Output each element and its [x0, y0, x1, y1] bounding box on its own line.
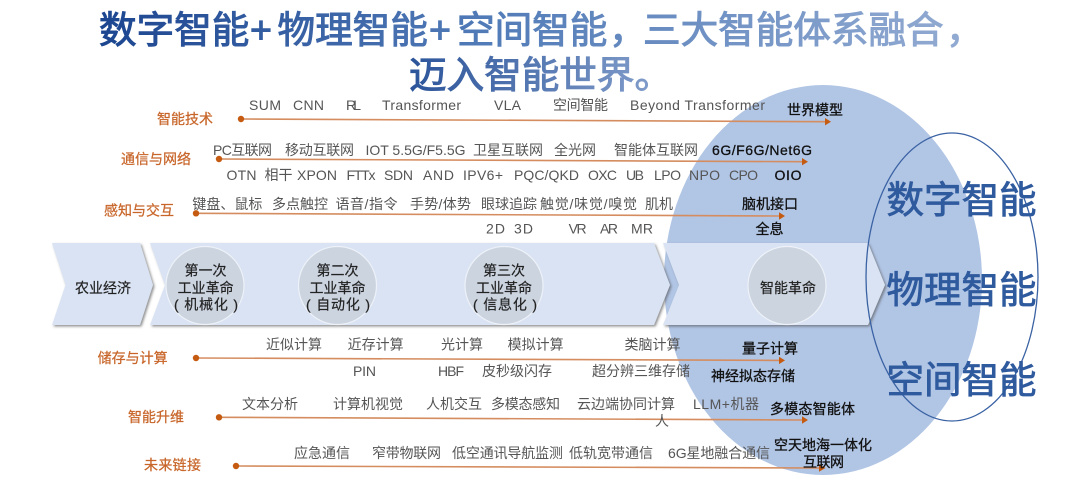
row: intelligent technology: RL [346, 97, 361, 113]
row: intelligence dimension upgrade: 多模态感知 [491, 396, 560, 412]
row: perception and interaction: 肌机 [645, 196, 673, 212]
row: storage and computing [98, 336, 798, 384]
node: intelligence revolution [748, 246, 826, 324]
title: 数字智能 [99, 9, 249, 51]
row: intelligence dimension upgrade: 文本分析 [242, 396, 298, 412]
row: intelligent technology: 空间智能 [553, 97, 608, 113]
label: perception and interaction: 感知与交互 [104, 202, 174, 218]
row: future links: 窄带物联网 [372, 445, 441, 461]
row: perception and interaction: AR [600, 220, 618, 236]
row: future links: 空天地海一体化 [774, 437, 872, 453]
row: communications and networks: XPON [297, 167, 337, 183]
row: perception and interaction: 多点触控 [272, 196, 328, 212]
row: communications and networks: 相干 [264, 167, 292, 183]
title: + [429, 9, 451, 51]
title: 空间智能 [457, 9, 607, 51]
row: future links [144, 437, 872, 473]
row: perception and interaction: MR [631, 220, 653, 236]
row: intelligence dimension upgrade: 人 [655, 413, 669, 429]
node: first industrial revolution: 工业革命 [178, 280, 234, 296]
label: intelligent technology: 智能技术 [157, 111, 213, 127]
row: communications and networks: 智能体互联网 [614, 142, 698, 158]
title: + [250, 9, 272, 51]
row: communications and networks: PC互联网 [213, 142, 272, 158]
row: communications and networks: 移动互联网 [285, 142, 354, 158]
title: 迈入智能世界。 [409, 54, 672, 96]
label: storage and computing: 储存与计算 [98, 350, 168, 366]
row: intelligent technology: VLA [494, 97, 522, 113]
row: perception and interaction: 语音/指令 [336, 196, 398, 212]
row: communications and networks: OXC [588, 167, 617, 183]
text: agricultural economy: 农业经济 [75, 280, 131, 296]
node: third industrial revolution [465, 246, 543, 324]
row: intelligent technology: CNN [293, 97, 324, 113]
row: communications and networks: OIO [774, 167, 802, 183]
row: intelligence dimension upgrade: 人机交互 [426, 396, 482, 412]
row: communications and networks: AND [423, 167, 454, 183]
node: first industrial revolution: ( 机械化 ) [174, 296, 238, 312]
title: 物理智能 [278, 9, 428, 51]
row: future links: 低空通讯导航监测 [452, 445, 563, 461]
node: intelligence revolution: 智能革命 [760, 280, 816, 296]
title [99, 9, 984, 96]
node: third industrial revolution: ( 信息化 ) [473, 296, 537, 312]
row: perception and interaction: 2D [486, 220, 505, 236]
row: storage and computing: 量子计算 [742, 340, 798, 356]
row: communications and networks: LPO [654, 167, 681, 183]
node: second industrial revolution: 第二次 [316, 262, 358, 278]
row: intelligence dimension upgrade: 多模态智能体 [770, 401, 855, 417]
row: communications and networks: CPO [729, 167, 758, 183]
node: first industrial revolution [166, 246, 244, 324]
chevron: agricultural economy [52, 243, 153, 325]
row: storage and computing: HBF [438, 363, 464, 379]
row: perception and interaction: 触觉/味觉/嗅觉 [540, 196, 637, 212]
row: intelligent technology: SUM [249, 97, 281, 113]
label: future links: 未来链接 [144, 457, 201, 473]
row: intelligence dimension upgrade: LLM+机器 [693, 396, 759, 412]
row: intelligent technology: Beyond Transformer [630, 97, 765, 113]
row: communications and networks [121, 142, 812, 183]
text: physical intelligence: 物理智能 [886, 269, 1036, 311]
title: ， [609, 9, 647, 51]
row: perception and interaction [104, 196, 798, 237]
row: communications and networks: OTN [226, 167, 256, 183]
row: communications and networks: NPO [689, 167, 720, 183]
row: future links: 6G星地融合通信 [668, 445, 770, 461]
row: communications and networks: 6G/F6G/Net6G [712, 142, 812, 158]
row: communications and networks: PQC/QKD [514, 167, 579, 183]
row: storage and computing: 神经拟态存储 [711, 368, 795, 384]
text: spatial intelligence: 空间智能 [886, 359, 1036, 401]
row: communications and networks: FTTx [346, 167, 376, 183]
row: perception and interaction: 3D [514, 220, 533, 236]
row: perception and interaction: VR [569, 220, 587, 236]
row: perception and interaction: 全息 [756, 221, 784, 237]
row: intelligent technology: Transformer [382, 97, 461, 113]
node: second industrial revolution [298, 246, 376, 324]
row: communications and networks: IPV6+ [463, 167, 503, 183]
row: perception and interaction: 键盘、鼠标 [192, 196, 262, 212]
row: intelligent technology [157, 97, 843, 127]
row: communications and networks: SDN [384, 167, 413, 183]
node: first industrial revolution: 第一次 [184, 262, 226, 278]
outline ellipse: three intelligence systems [866, 133, 1038, 421]
title: 三大智能体系融合 [643, 9, 944, 51]
large blue ellipse: intelligent world [664, 85, 982, 475]
row: intelligence dimension upgrade: 计算机视觉 [333, 396, 403, 412]
node: second industrial revolution: ( 自动化 ) [306, 296, 370, 312]
text: digital intelligence: 数字智能 [886, 179, 1036, 221]
row: intelligence dimension upgrade [128, 396, 855, 429]
chevron: intelligence revolution [663, 243, 885, 325]
node: third industrial revolution: 工业革命 [476, 280, 532, 296]
row: storage and computing: 光计算 [441, 336, 483, 352]
row: storage and computing: 皮秒级闪存 [482, 363, 552, 379]
label: communications and networks: 通信与网络 [121, 151, 191, 167]
title: ， [946, 9, 984, 51]
label: intelligence dimension upgrade: 智能升维 [128, 409, 184, 425]
row: intelligence dimension upgrade: 云边端协同计算 [577, 396, 675, 412]
chevron: industrial revolutions [150, 243, 670, 325]
row: communications and networks: 全光网 [554, 142, 596, 158]
row: future links: 低轨宽带通信 [569, 445, 653, 461]
row: perception and interaction: 脑机接口 [742, 196, 798, 212]
row: storage and computing: 类脑计算 [624, 336, 680, 352]
node: second industrial revolution: 工业革命 [310, 280, 366, 296]
row: future links: 互联网 [803, 454, 844, 470]
row: intelligent technology: 世界模型 [787, 102, 843, 118]
row: perception and interaction: 手势/体势 [410, 196, 471, 212]
chevron timeline [52, 243, 885, 325]
row: storage and computing: 超分辨三维存储 [592, 363, 690, 379]
row: communications and networks: IOT 5.5G/F5.5G [366, 142, 466, 158]
row: storage and computing: 近存计算 [348, 336, 404, 352]
row: storage and computing: PIN [353, 363, 376, 379]
row: communications and networks: 卫星互联网 [473, 142, 543, 158]
row: storage and computing: 模拟计算 [508, 336, 564, 352]
row: perception and interaction: 眼球追踪 [481, 196, 537, 212]
row: future links: 应急通信 [294, 445, 350, 461]
node: third industrial revolution: 第三次 [483, 262, 525, 278]
row: communications and networks: UB [626, 167, 644, 183]
row: storage and computing: 近似计算 [266, 336, 322, 352]
